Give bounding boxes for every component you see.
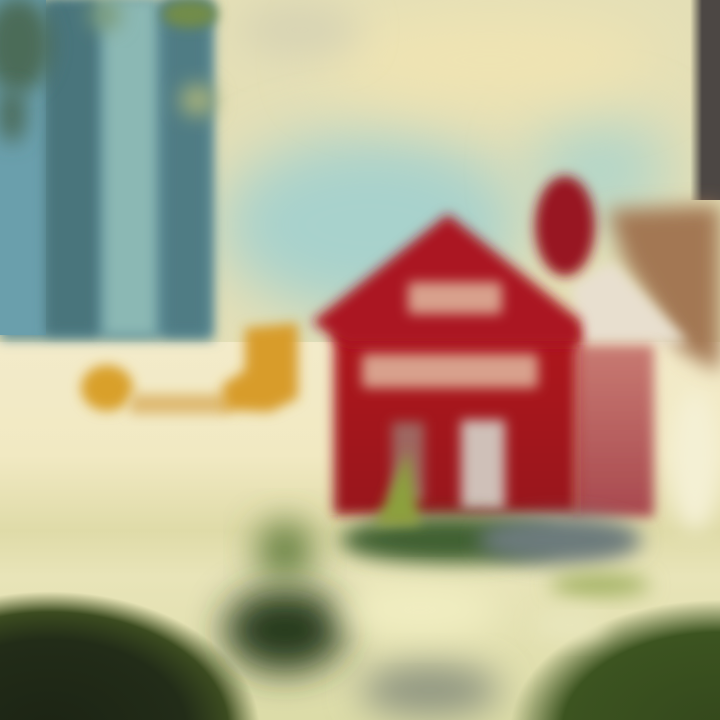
foliage at top of building: [0, 0, 218, 143]
lower sign: [362, 354, 538, 388]
house: [312, 176, 688, 564]
dark strip at right edge: [690, 0, 720, 200]
ground: [0, 342, 720, 720]
right door: [461, 420, 505, 510]
yellow objects on the left: [81, 323, 298, 414]
sky background: [0, 0, 720, 360]
blue building: [0, 0, 214, 340]
pink side wall: [574, 345, 654, 517]
chimney: [535, 176, 595, 276]
white side roof: [572, 262, 688, 345]
grass blade: [375, 450, 420, 525]
upper sign: [408, 282, 502, 314]
red front wall: [334, 325, 577, 515]
grass and base: [340, 516, 560, 564]
red gable roof: [312, 214, 582, 345]
dark green foreground foliage: [0, 522, 720, 720]
left door: [392, 422, 424, 502]
brown neighbouring roof: [608, 205, 720, 372]
